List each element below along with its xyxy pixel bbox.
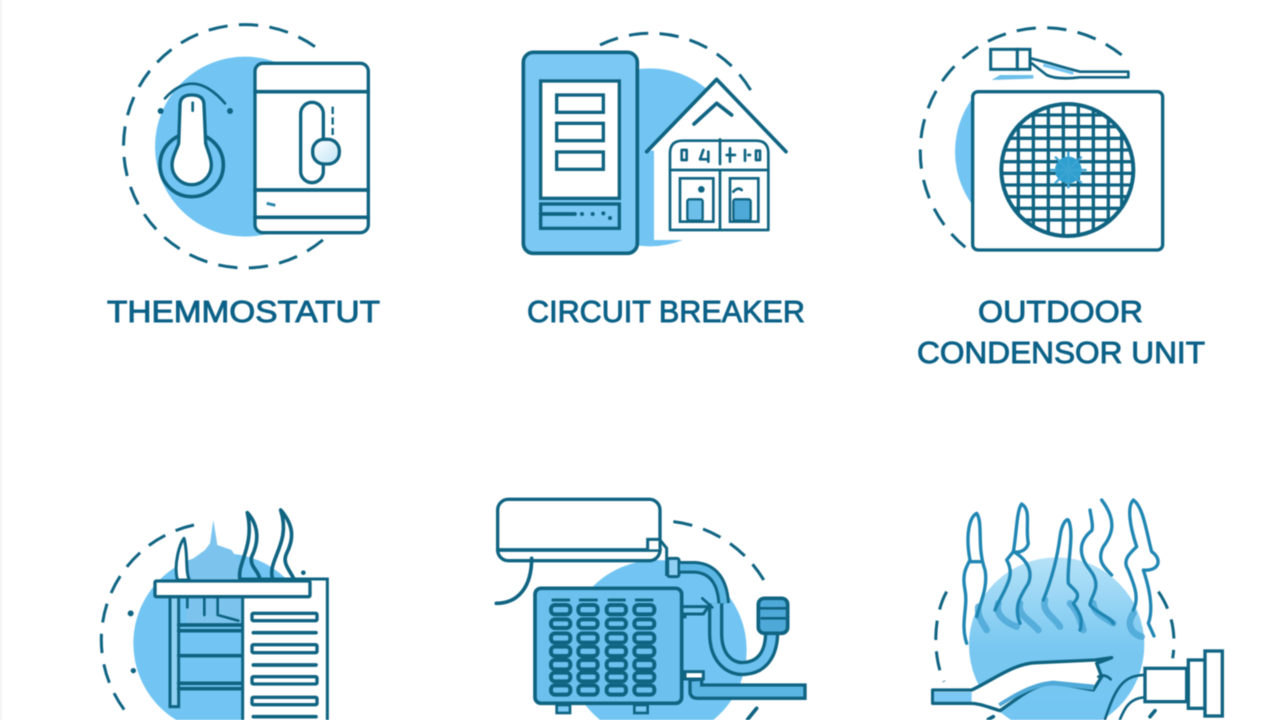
icon: breaker panel [523, 52, 637, 253]
blue disc [155, 57, 335, 237]
icon: refrigerant pipes [660, 540, 805, 698]
icon: wall control unit [255, 63, 368, 233]
icon: smudged waves inside disc [978, 600, 1142, 637]
icon: rising blue haze [187, 520, 242, 623]
heading: outdoor condenser label: CONDENSOR UNIT [917, 335, 1205, 370]
icon: thermometer dial [158, 84, 233, 197]
icon: top rail [155, 581, 310, 597]
dashed ring [101, 525, 194, 715]
icon: air waves [964, 500, 1158, 643]
blue disc [567, 560, 747, 720]
blue disc [969, 557, 1144, 720]
icon: refrigerant valve and tubes [991, 49, 1128, 80]
blue sliver [954, 100, 972, 203]
panel: thermostat icon [124, 25, 368, 268]
panel: leaking air duct icon [933, 500, 1222, 720]
dashed ring [673, 522, 768, 719]
heading: outdoor condenser label [917, 294, 1205, 370]
blue disc [561, 68, 739, 246]
icon: ladder frame [170, 597, 242, 707]
heading: thermostat label: THEMMOSTATUT [107, 294, 380, 329]
icon: heat flames [176, 510, 294, 580]
dashed ring [920, 28, 1122, 248]
dashed ring [936, 592, 1174, 719]
icon: torn duct [933, 658, 1112, 711]
icon: outdoor coil unit [535, 588, 682, 713]
icon: house with switches [647, 79, 786, 240]
icon: condenser housing and fan grille [973, 92, 1163, 250]
panel: split system icon [496, 499, 805, 720]
dashed ring [124, 25, 327, 268]
panel: circuit breaker icon [523, 33, 786, 253]
icon: indoor wall unit [496, 499, 660, 603]
blue disc [133, 553, 313, 720]
icon: duct connector [1105, 651, 1222, 719]
heading: circuit breaker label: CIRCUIT BREAKER [527, 294, 805, 329]
panel: overheating filter icon [101, 510, 327, 720]
heading: outdoor condenser label: OUTDOOR [978, 294, 1143, 329]
dashed ring [600, 33, 753, 95]
panel: outdoor condenser icon [920, 28, 1163, 250]
icon: vented cabinet [243, 579, 327, 720]
